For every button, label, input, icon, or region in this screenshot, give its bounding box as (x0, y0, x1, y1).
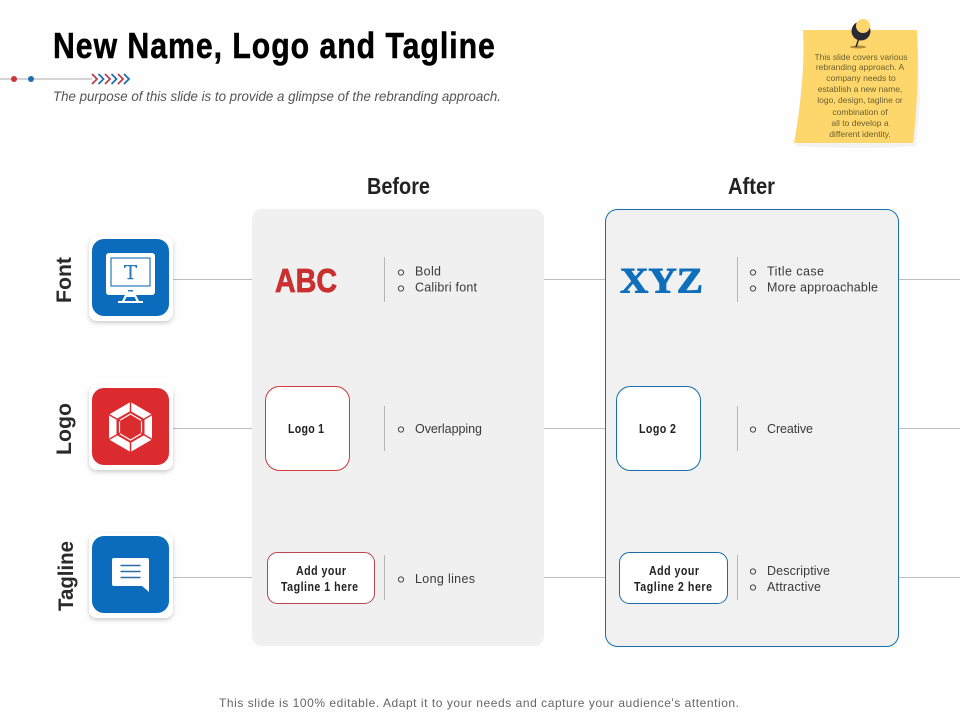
logo notes: before (384, 406, 482, 451)
font notes: after (738, 257, 878, 302)
tagline 1 box: Add your (296, 564, 346, 578)
sticky note text: establish a new name, (818, 84, 902, 94)
font notes: after: More approachable (767, 280, 878, 294)
icon: speech bubble (89, 533, 173, 618)
sticky note text: company needs to (826, 73, 896, 83)
sticky note text: This slide covers various (814, 52, 908, 62)
heading: After: After (728, 173, 775, 199)
icon: monitor with letter T (89, 236, 173, 321)
logo 2 box: Logo 2 (639, 422, 676, 436)
logo 1 box (266, 386, 350, 470)
font notes: before: Bold (415, 264, 441, 278)
logo notes: before: Overlapping (415, 422, 482, 436)
sticky note text (814, 52, 908, 139)
panel: after (606, 210, 898, 646)
tagline 2 box (620, 552, 728, 604)
tagline 2 box: Add your (649, 564, 699, 578)
tagline notes: after: Descriptive (767, 564, 830, 578)
title: New Name, Logo and Tagline (53, 27, 495, 67)
title decoration: line, dots and chevrons (0, 74, 129, 84)
sticky note text: different identity. (829, 129, 891, 139)
icon: push pin (850, 19, 870, 48)
font notes: before: Calibri font (415, 280, 478, 294)
tagline 1 box (268, 552, 374, 604)
tagline 1 box: Tagline 1 here (281, 580, 359, 594)
row label: Logo: Logo (53, 403, 76, 455)
heading: Before: Before (367, 173, 430, 199)
ABC sample: ABC (275, 262, 337, 299)
panel: before (252, 209, 544, 646)
row label: Font: Font (53, 257, 76, 303)
sticky note text: logo, design, tagline or (817, 95, 903, 105)
icon: hexagonal gem (89, 385, 173, 470)
row label: Tagline: Tagline (55, 541, 78, 611)
font notes: before (384, 257, 478, 302)
sticky note callout (794, 19, 920, 148)
sticky note text: combination of (832, 107, 888, 117)
logo notes: after: Creative (767, 422, 813, 436)
sticky note text: rebranding approach. A (816, 62, 905, 72)
subtitle: The purpose of this slide is to provide a glimpse of the rebranding approach. (53, 88, 501, 104)
logo 1 box: Logo 1 (288, 422, 325, 436)
XYZ sample: XYZ (620, 260, 703, 300)
font notes: after: Title case (767, 264, 824, 278)
sticky note text: all to develop a (831, 118, 889, 128)
footer note: This slide is 100% editable. Adapt it to your needs and capture your audience's attention. (219, 696, 739, 710)
tagline 2 box: Tagline 2 here (634, 580, 713, 594)
logo notes: after (738, 406, 813, 451)
tagline notes: after: Attractive (767, 580, 821, 594)
tagline notes: before (384, 555, 475, 600)
logo 2 box (616, 386, 700, 470)
tagline notes: before: Long lines (415, 572, 475, 586)
tagline notes: after (738, 555, 830, 600)
connector lines (170, 280, 960, 578)
